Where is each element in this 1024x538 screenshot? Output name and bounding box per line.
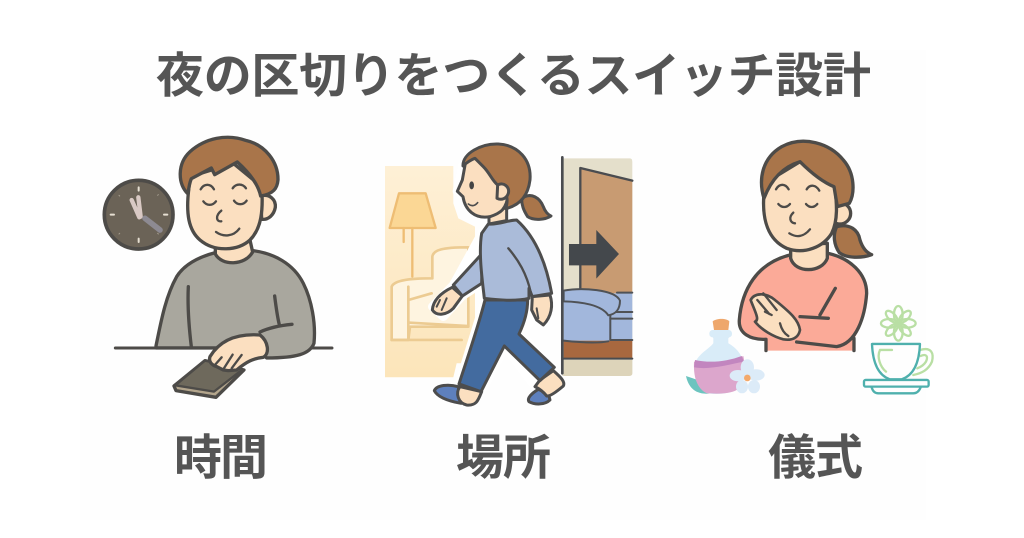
table line (115, 343, 332, 352)
neck (489, 203, 507, 224)
hand (210, 335, 267, 371)
illustration: man with clock and phone (104, 137, 332, 397)
ear (497, 184, 509, 199)
sweater outline (739, 253, 867, 351)
phone (174, 361, 244, 397)
feet (458, 387, 482, 405)
living room background (385, 166, 475, 377)
hair (463, 144, 530, 209)
ear (261, 195, 275, 219)
sweater (480, 220, 552, 300)
ear (829, 203, 851, 224)
eye and smile (469, 181, 474, 189)
white halo around figure (432, 143, 563, 405)
slippers (434, 385, 461, 403)
ponytail (834, 226, 872, 257)
sweater (156, 251, 314, 358)
icon: arrow (569, 230, 619, 279)
face (188, 163, 262, 249)
face (764, 162, 836, 251)
label: 儀式: 儀式 (768, 432, 863, 485)
illustration: woman with aroma and tea (686, 141, 933, 394)
panel: time (104, 137, 332, 485)
near hand (532, 295, 552, 325)
face (457, 157, 508, 217)
face details (776, 185, 819, 236)
illustration: walking woman moving between rooms (385, 143, 632, 405)
panel: ritual (686, 141, 933, 485)
neck (791, 243, 827, 270)
icon: tea cup with flower (864, 306, 933, 393)
icon: wall clock (104, 180, 173, 249)
ponytail (522, 196, 551, 219)
sweater fill (739, 253, 867, 351)
woman (739, 141, 872, 351)
title: 夜の区切りをつくるスイッチ設計 (156, 50, 871, 103)
far arm (453, 253, 482, 296)
flower (730, 359, 765, 393)
label: 場所: 場所 (456, 432, 551, 485)
trousers (459, 300, 554, 392)
eyes and mouth (201, 185, 247, 235)
panel: place (385, 143, 632, 485)
neck (215, 240, 253, 263)
hands (751, 294, 800, 340)
hair (762, 141, 853, 207)
hair (180, 137, 278, 196)
woman (432, 144, 564, 405)
bedroom background (562, 157, 632, 376)
icon: oil bottle with flower (686, 319, 765, 394)
label: 時間: 時間 (174, 432, 268, 485)
